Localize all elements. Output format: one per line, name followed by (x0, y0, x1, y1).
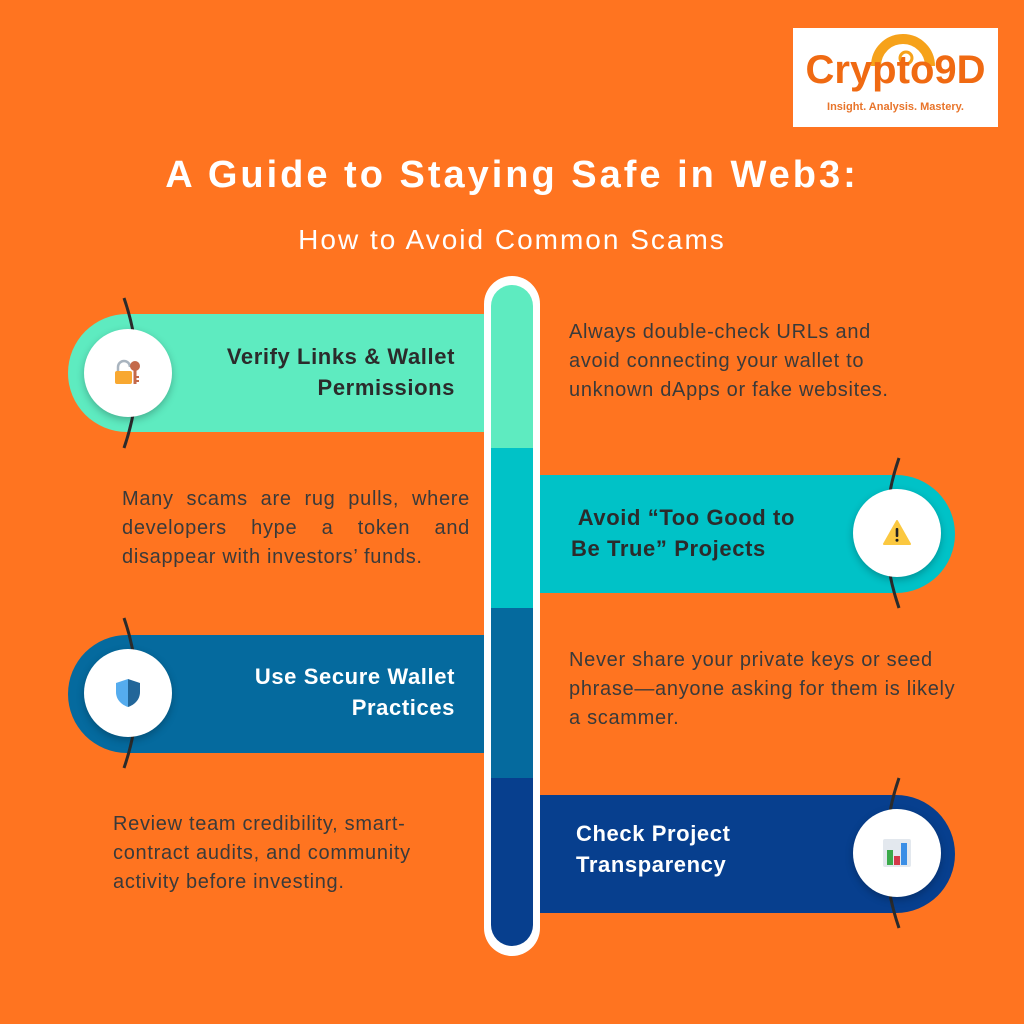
logo (793, 28, 998, 127)
text: verify links: unknown dApps or fake websites. (569, 379, 889, 401)
vertical timeline bar (484, 276, 540, 956)
heading 2 (571, 505, 795, 561)
text: rug pulls: Many scams are rug pulls, where (122, 488, 470, 510)
heading 1: Permissions (318, 375, 455, 400)
icon: shield (84, 649, 172, 737)
heading 3: Practices (352, 695, 455, 720)
text: private keys: a scammer. (569, 707, 679, 729)
heading 3 (255, 664, 455, 720)
heading 1 (227, 344, 455, 400)
logo tagline: Insight. Analysis. Mastery. (827, 101, 964, 113)
icon: warning (853, 489, 941, 577)
heading 4 (576, 821, 731, 877)
subtitle: How to Avoid Common Scams (298, 224, 726, 255)
text: private keys (569, 649, 955, 729)
heading 2: Avoid “Too Good to (578, 505, 795, 530)
heading 4: Check Project (576, 821, 731, 846)
icon: lock and key (84, 329, 172, 417)
heading 2: Be True” Projects (571, 536, 766, 561)
logo text: Crypto9D (805, 48, 986, 92)
text: team credibility: activity before investing. (113, 871, 345, 893)
text: private keys: phrase—anyone asking for them is likely (569, 678, 955, 700)
text: team credibility (113, 813, 411, 893)
text: verify links: Always double-check URLs and (569, 321, 871, 343)
logo arc (871, 34, 935, 66)
text: private keys: Never share your private keys or seed (569, 649, 933, 671)
heading 3: Use Secure Wallet (255, 664, 455, 689)
title: A Guide to Staying Safe in Web3: (165, 154, 859, 196)
text: team credibility: contract audits, and community (113, 842, 411, 864)
band 4: transparency (531, 795, 955, 913)
icon: bar chart (853, 809, 941, 897)
text: verify links (569, 321, 889, 401)
text: rug pulls (122, 488, 470, 568)
band 1: verify links (68, 314, 493, 432)
text: rug pulls: developers hype a token and (122, 517, 470, 539)
heading 1: Verify Links & Wallet (227, 344, 455, 369)
band 3: secure wallet (68, 635, 493, 753)
text: rug pulls: disappear with investors’ funds. (122, 546, 423, 568)
text: team credibility: Review team credibility, smart- (113, 813, 406, 835)
band 2: too good (531, 475, 955, 593)
text: verify links: avoid connecting your wallet to (569, 350, 864, 372)
heading 4: Transparency (576, 852, 726, 877)
